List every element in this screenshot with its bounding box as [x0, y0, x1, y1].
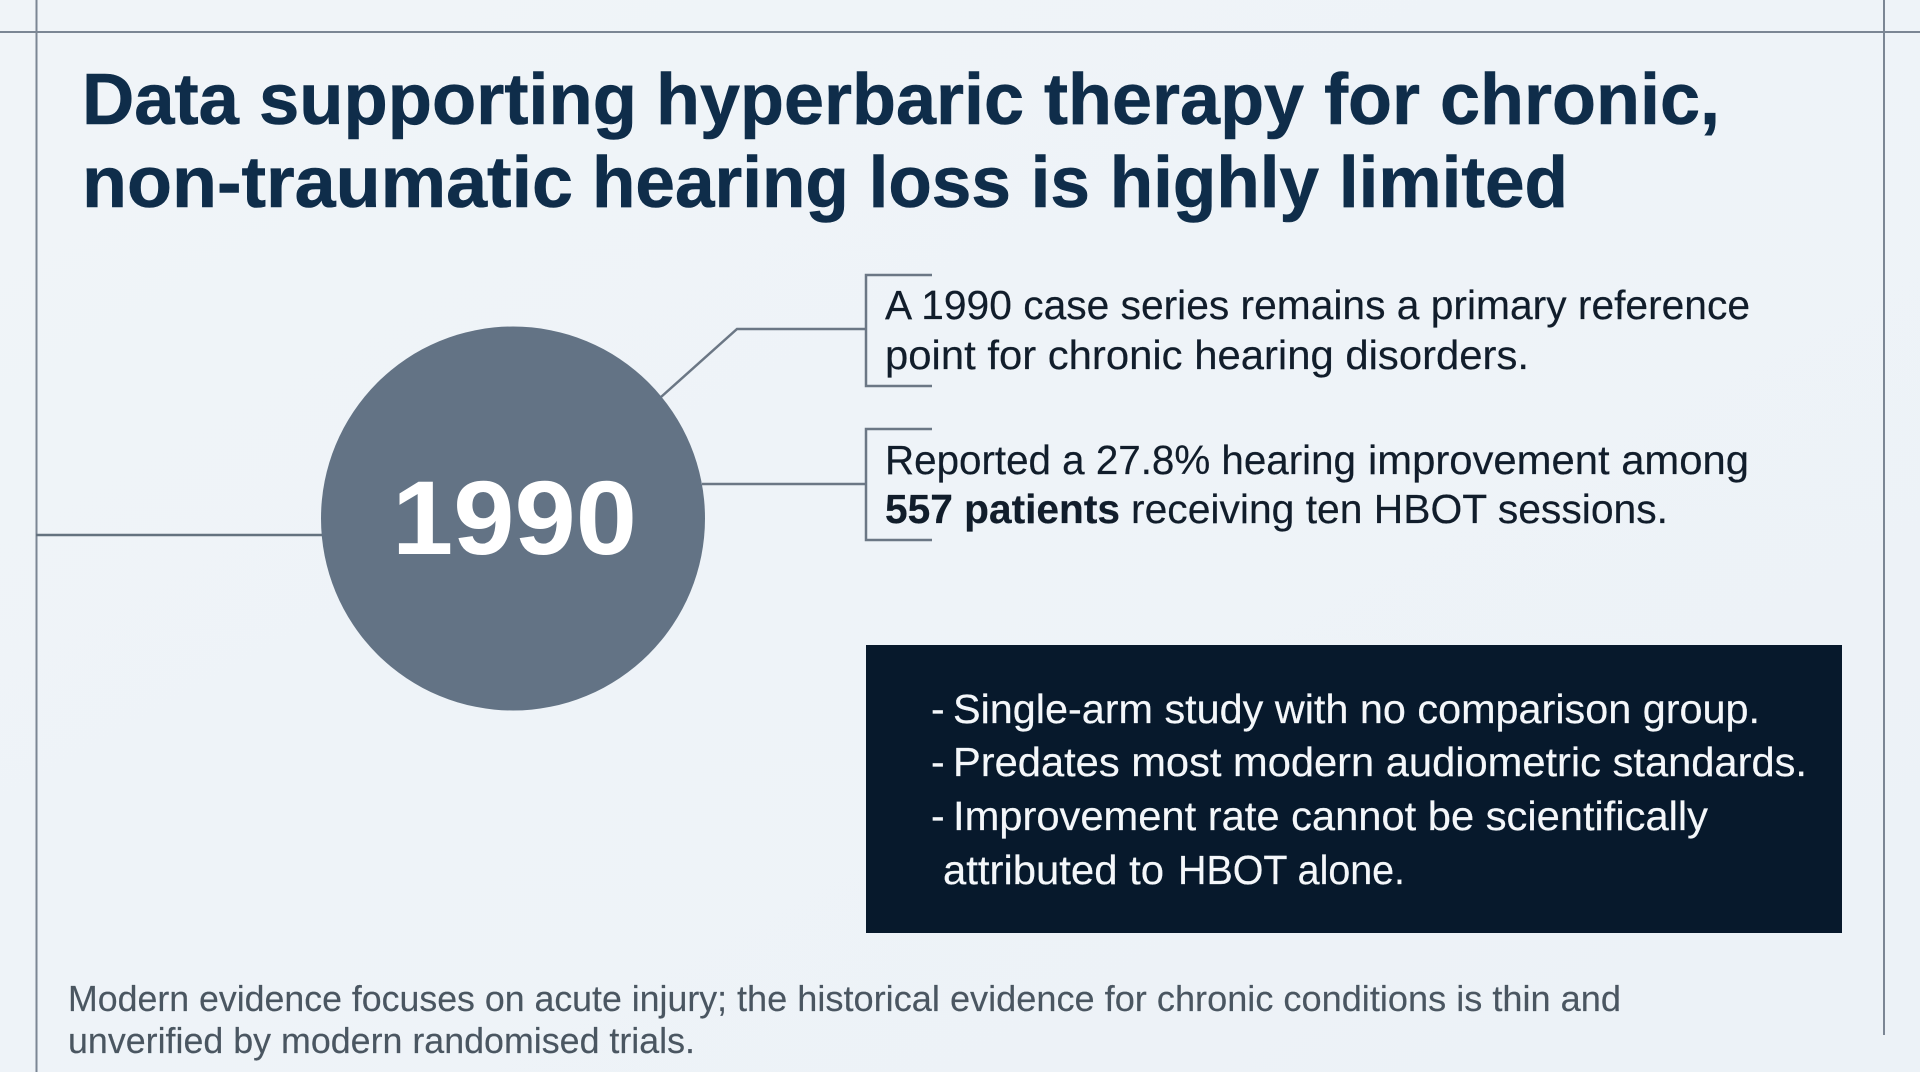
year circle: 1990 [392, 460, 637, 577]
footnote: the historical evidence for chronic conditions is thin and [737, 978, 1621, 1019]
finding 2: receiving ten HBOT sessions. [1131, 486, 1668, 532]
finding 2: Reported a 27.8% hearing [885, 437, 1356, 483]
title [82, 60, 1720, 223]
finding 1: point for chronic hearing disorders. [885, 332, 1529, 378]
callout: study limitations: Predates most modern audiometric standards. [953, 739, 1807, 785]
footnote: Modern evidence focuses on acute injury; [68, 978, 727, 1019]
connector: circle to second finding [702, 483, 866, 485]
callout: study limitations: - [931, 686, 945, 732]
callout: study limitations: attributed to [943, 847, 1164, 893]
finding 1 [866, 275, 1750, 386]
callout: study limitations: Improvement rate cannot be scientifically [953, 793, 1709, 839]
title: hearing loss is highly limited [592, 143, 1568, 223]
callout: study limitations: HBOT alone. [1178, 847, 1405, 893]
title: Data supporting [82, 60, 637, 140]
connector: timeline to circle [36, 534, 324, 536]
finding 2: improvement among [1368, 437, 1749, 483]
title: non-traumatic [82, 143, 573, 223]
footnote [68, 978, 1621, 1061]
callout: study limitations: - [931, 793, 945, 839]
title: hyperbaric therapy for chronic, [656, 60, 1720, 140]
callout: study limitations: Single-arm study with no comparison group. [953, 686, 1760, 732]
callout: study limitations [866, 645, 1842, 933]
footnote: unverified by modern randomised trials. [68, 1020, 695, 1061]
finding 2: 557 patients [885, 486, 1120, 532]
year circle [321, 326, 705, 710]
finding 1: A 1990 case series remains a primary reference [885, 282, 1750, 328]
callout: study limitations: - [931, 739, 945, 785]
finding 2 [866, 429, 1749, 540]
connector: circle to first finding [661, 329, 866, 397]
